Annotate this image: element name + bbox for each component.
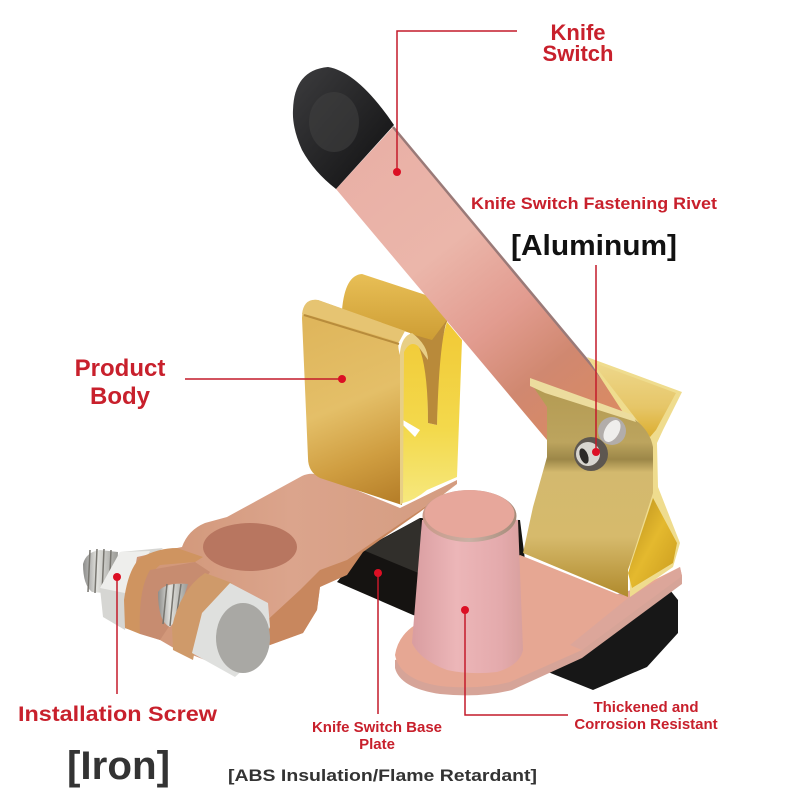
label: product body: Product [75, 355, 165, 382]
product: knife switch assembly [83, 67, 682, 695]
label: product body: Body [90, 383, 151, 410]
inner thread [158, 584, 188, 627]
front gold clip [302, 300, 428, 505]
nut and outer thread [83, 548, 163, 630]
base plate [395, 555, 682, 695]
label: aluminum: [Aluminum] [511, 230, 677, 262]
lower jaw [172, 573, 232, 660]
label: abs insulation: [ABS Insulation/Flame Retardant] [228, 766, 537, 785]
upper jaw face [140, 562, 210, 640]
label: thickened: Corrosion Resistant [574, 716, 718, 733]
label: iron: [Iron] [67, 744, 170, 788]
label: installation screw: Installation Screw [18, 702, 217, 726]
rivet [574, 417, 626, 471]
leader lines [117, 31, 596, 715]
black handle grip [293, 67, 394, 189]
leader dots [113, 168, 600, 614]
label: thickened: Thickened and [593, 699, 699, 716]
label: knife switch: Switch [543, 41, 613, 66]
upper jaw rim [124, 548, 203, 634]
cone post [412, 490, 523, 673]
label: base plate: Knife Switch Base [312, 719, 442, 736]
clip interior [403, 320, 462, 503]
label: knife switch: Knife [550, 20, 606, 45]
right clip front plate [523, 378, 653, 597]
black insulation block right [548, 590, 678, 690]
label: fastening rivet: Knife Switch Fastening Rivet [471, 195, 718, 213]
right clip inner [628, 498, 677, 588]
label: base plate: Plate [359, 736, 395, 753]
hex bolt head [192, 583, 270, 677]
back gold clip [342, 274, 447, 400]
black insulation block left [337, 518, 525, 620]
right clip rear wing [587, 357, 682, 597]
blade [336, 127, 633, 440]
copper terminal [124, 474, 457, 660]
